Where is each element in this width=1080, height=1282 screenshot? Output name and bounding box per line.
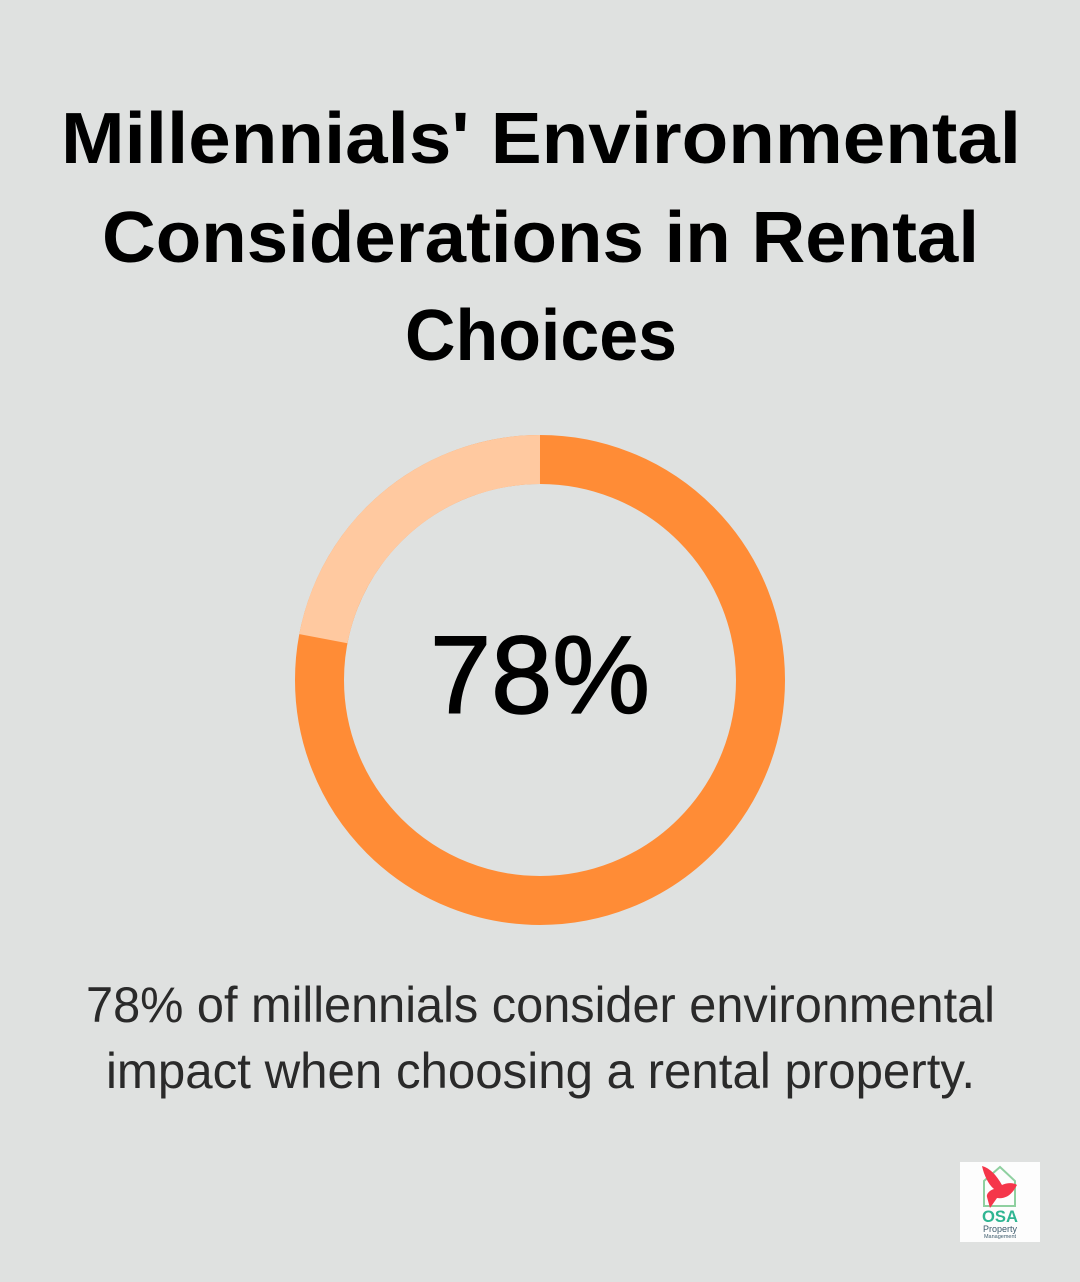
title xyxy=(61,99,1021,376)
logo: OSA Property Management xyxy=(960,1162,1040,1242)
title: Millennials' Environmental xyxy=(61,99,1021,179)
description text: 78% of millennials consider environmental xyxy=(86,977,995,1033)
logo: OSA Property Management: OSA xyxy=(982,1207,1018,1226)
logo: OSA Property Management: Management xyxy=(984,1234,1017,1240)
title: Considerations in Rental xyxy=(102,198,979,278)
logo: OSA Property Management: Property xyxy=(983,1224,1018,1234)
description text: impact when choosing a rental property. xyxy=(106,1043,975,1099)
title: Choices xyxy=(405,296,677,376)
description text xyxy=(86,977,995,1099)
donut value: 78% xyxy=(430,614,650,737)
donut chart: 78% xyxy=(320,460,760,900)
